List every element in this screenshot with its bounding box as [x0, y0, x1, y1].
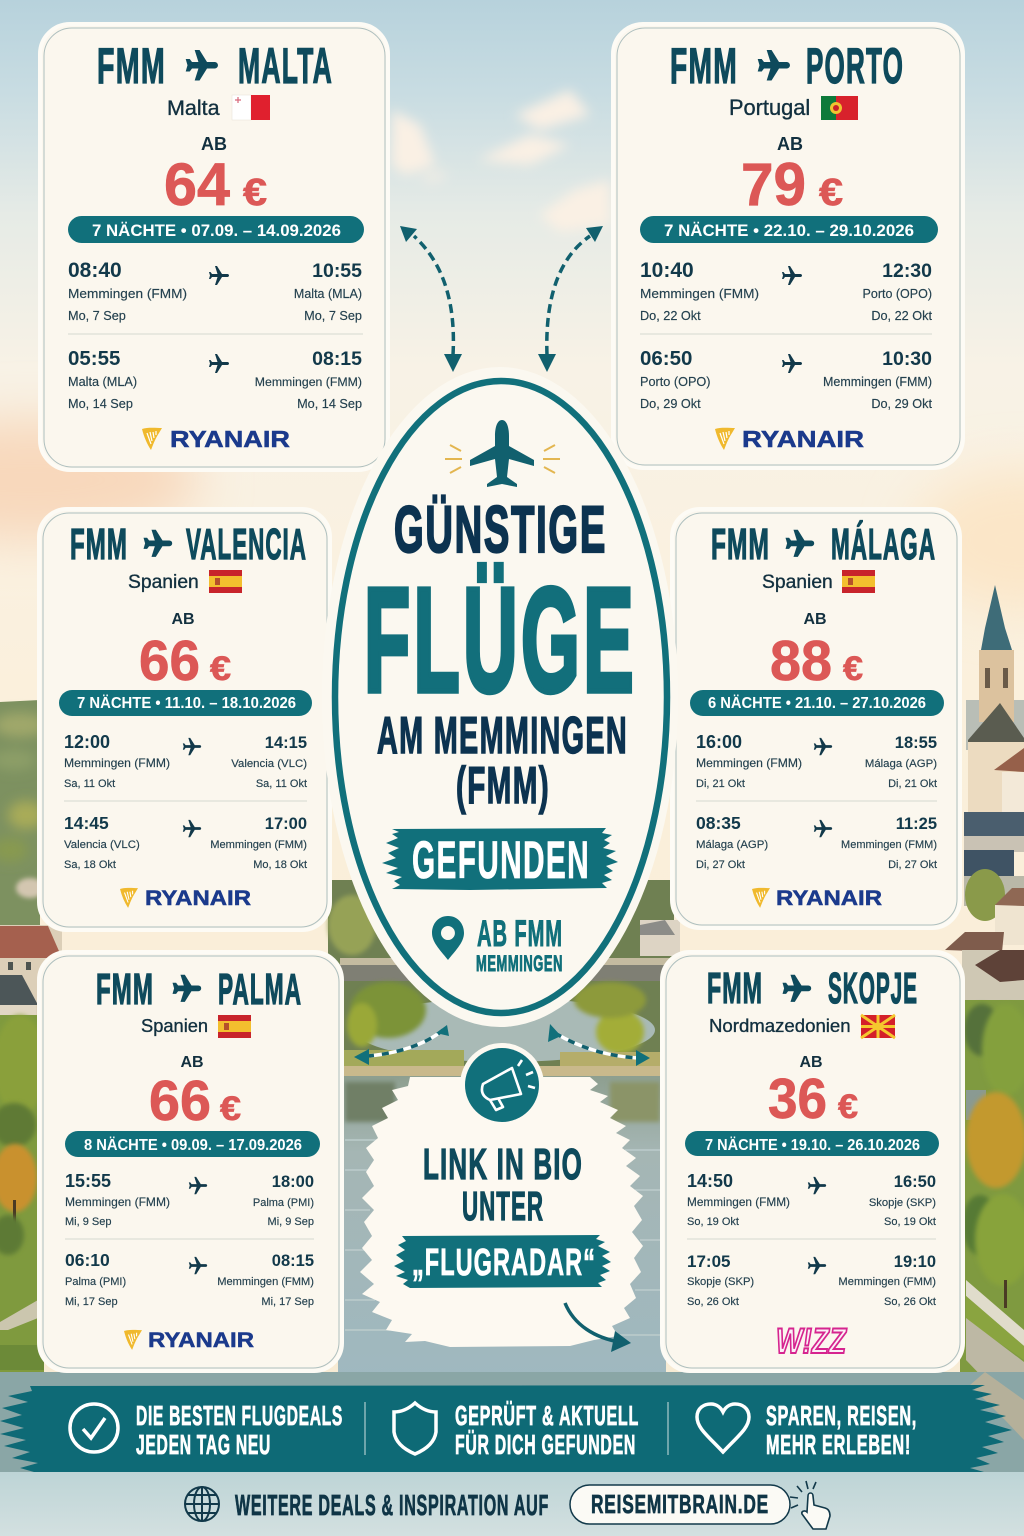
- text: beste Flugdeals: DIE BESTEN FLUGDEALS: [136, 1400, 343, 1431]
- outbound flight: So, 19 Okt: [884, 1216, 936, 1228]
- return flight: Memmingen (FMM): [841, 839, 937, 851]
- town right: [966, 700, 1024, 750]
- logo: Ryanair: RYANAIR: [776, 887, 882, 910]
- return flight: Di, 27 Okt: [696, 859, 745, 871]
- button: reisemitbrain.de: REISEMITBRAIN.DE: [591, 1489, 769, 1519]
- icon: shield: [394, 1403, 436, 1454]
- price: ab 66 euro: 66: [139, 629, 200, 693]
- return flight: So, 26 Okt: [884, 1296, 936, 1308]
- return flight: Mi, 17 Sep: [65, 1296, 118, 1308]
- icon: heart: [697, 1404, 749, 1452]
- banner: benefits: [0, 1385, 1012, 1472]
- banner: Gefunden: [382, 828, 618, 890]
- icon: pointer hand: [790, 1481, 830, 1529]
- hazy hillside left: [0, 700, 40, 930]
- text: geprüft und aktuell: GEPRÜFT & AKTUELL: [455, 1400, 639, 1431]
- outbound flight: Skopje (SKP): [869, 1197, 936, 1209]
- right trees and promenade: [960, 1000, 1024, 1380]
- outbound flight: Mi, 9 Sep: [268, 1216, 314, 1228]
- heading: FMM to Malaga: [711, 519, 936, 569]
- country: Malta with flag: Malta: [167, 96, 220, 120]
- outbound flight: Memmingen (FMM): [687, 1196, 790, 1209]
- price: ab 36 euro: €: [838, 1088, 858, 1126]
- text: geprüft und aktuell: [455, 1400, 639, 1460]
- logo: Ryanair: [715, 426, 864, 452]
- price: ab 79 euro: €: [819, 172, 843, 214]
- heading: FMM to Valencia: [70, 520, 307, 569]
- return flight: [64, 813, 307, 871]
- date pill: 7 NÄCHTE • 19.10. – 26.10.2026: [705, 1137, 920, 1154]
- price: ab 88 euro: €: [843, 650, 863, 688]
- return flight: Memmingen (FMM): [217, 1276, 314, 1288]
- return flight: Di, 27 Okt: [888, 859, 937, 871]
- country: Portugal with flag: [729, 95, 858, 120]
- heading: am Memmingen (FMM): AM MEMMINGEN: [377, 707, 628, 765]
- return flight: Mo, 14 Sep: [297, 397, 362, 411]
- panel: link in bio: [360, 1043, 643, 1352]
- date pill: 6 NÄCHTE • 21.10. – 27.10.2026: [708, 695, 926, 712]
- outbound flight: Valencia (VLC): [231, 758, 307, 770]
- outbound flight: [696, 732, 937, 790]
- price: ab 64 euro: €: [243, 172, 267, 214]
- return flight: Porto (OPO): [640, 375, 710, 389]
- text: link in bio unter: UNTER: [462, 1183, 544, 1229]
- text: weitere deals: WEITERE DEALS & INSPIRATION AUF: [235, 1490, 549, 1522]
- heading: Flüge: FLÜGE: [364, 558, 637, 723]
- heading: FMM to Porto: FMM: [670, 38, 738, 94]
- panel: Porto: [613, 24, 963, 468]
- left trees and meadow: [0, 1015, 44, 1375]
- footer: website link: [185, 1481, 830, 1529]
- outbound flight: Sa, 11 Okt: [256, 778, 307, 790]
- outbound flight: Málaga (AGP): [865, 758, 937, 770]
- date pill: 7 NÄCHTE • 07.09. – 14.09.2026: [92, 221, 341, 240]
- country: Spanien with flag: [141, 1015, 251, 1038]
- heading: am Memmingen (FMM): (FMM): [456, 757, 550, 815]
- return flight: [640, 347, 932, 411]
- outbound flight: 10:55: [312, 260, 362, 282]
- country: Nordmazedonien with flag: Nordmazedonien: [709, 1015, 851, 1036]
- heading: FMM to Palma: FMM: [96, 965, 154, 1014]
- price: ab 66 euro: AB: [171, 611, 195, 628]
- banner: Flugradar: „FLUGRADAR“: [412, 1242, 596, 1284]
- outbound flight: 10:40: [640, 259, 694, 282]
- return flight: Málaga (AGP): [696, 839, 768, 851]
- logo: Ryanair: RYANAIR: [148, 1329, 254, 1352]
- outbound flight: 14:50: [687, 1171, 733, 1191]
- date pill: [65, 1131, 320, 1157]
- return flight: 06:10: [65, 1250, 110, 1270]
- text: beste Flugdeals: JEDEN TAG NEU: [136, 1429, 271, 1460]
- heading: FMM to Valencia: FMM: [70, 520, 128, 569]
- heading: am Memmingen (FMM): [377, 707, 628, 815]
- date pill: 7 NÄCHTE • 11.10. – 18.10.2026: [77, 695, 296, 712]
- arrow: dashed to Porto: [538, 226, 603, 372]
- heading: FMM to Skopje: [707, 964, 918, 1013]
- outbound flight: Do, 22 Okt: [871, 309, 932, 323]
- heading: FMM to Porto: [670, 38, 904, 94]
- price: ab 36 euro: 36: [768, 1067, 827, 1131]
- return flight: Mo, 18 Okt: [253, 859, 307, 871]
- outbound flight: 14:15: [265, 734, 307, 752]
- logo: Ryanair: RYANAIR: [742, 426, 864, 452]
- price: ab 79 euro: 79: [741, 151, 806, 218]
- outbound flight: Memmingen (FMM): [64, 757, 170, 770]
- return flight: Do, 29 Okt: [871, 397, 932, 411]
- outbound flight: [687, 1171, 936, 1228]
- price: ab 36 euro: AB: [799, 1054, 823, 1071]
- price: ab 88 euro: [770, 611, 863, 693]
- panel: Valencia: [39, 509, 330, 930]
- outbound flight: [68, 259, 362, 323]
- arrow: to Skopje: [565, 1303, 631, 1352]
- return flight: Mo, 14 Sep: [68, 397, 133, 411]
- return flight: 08:15: [312, 348, 362, 370]
- date pill: [690, 690, 944, 716]
- date pill: 8 NÄCHTE • 09.09. – 17.09.2026: [84, 1137, 302, 1154]
- heading: FMM to Skopje: FMM: [707, 964, 763, 1013]
- country: Spanien with flag: Spanien: [762, 572, 833, 593]
- heading: FMM to Porto: PORTO: [806, 38, 904, 94]
- text: ab FMM Memmingen: AB FMM: [477, 913, 563, 954]
- outbound flight: Palma (PMI): [253, 1197, 314, 1209]
- outbound flight: 08:40: [68, 259, 122, 282]
- arrow: dashed to Palma: [354, 1025, 449, 1065]
- panel: Malaga: [672, 509, 960, 928]
- heading: FMM to Malta: FMM: [97, 38, 166, 94]
- return flight: Palma (PMI): [65, 1276, 126, 1288]
- icon: globe: [185, 1487, 219, 1521]
- button: reisemitbrain.de: [570, 1485, 790, 1524]
- outbound flight: 12:00: [64, 732, 110, 752]
- country: Spanien with flag: Spanien: [128, 572, 199, 593]
- price: ab 66 euro: AB: [180, 1054, 204, 1071]
- panel: Palma: [39, 952, 342, 1371]
- return flight: 17:05: [687, 1252, 730, 1271]
- outbound flight: Do, 22 Okt: [640, 309, 701, 323]
- price: ab 79 euro: AB: [777, 134, 803, 154]
- panel: Skopje: [662, 952, 963, 1371]
- outbound flight: 18:00: [272, 1173, 314, 1191]
- panel: central oval title: [322, 367, 678, 1027]
- return flight: 08:15: [272, 1252, 314, 1270]
- return flight: 14:45: [64, 813, 109, 833]
- river: [338, 1076, 666, 1382]
- date pill: [640, 216, 938, 243]
- heading: FMM to Palma: [96, 965, 302, 1014]
- outbound flight: Di, 21 Okt: [888, 778, 937, 790]
- return flight: 11:25: [896, 815, 937, 833]
- country: Malta with flag: [167, 95, 270, 120]
- price: ab 66 euro: 66: [149, 1069, 211, 1133]
- heading: FMM to Palma: PALMA: [218, 965, 302, 1014]
- country: Spanien with flag: [128, 570, 242, 593]
- outbound flight: Memmingen (FMM): [65, 1196, 170, 1209]
- price: ab 64 euro: 64: [164, 151, 231, 218]
- icon: plane with rays: [445, 420, 560, 487]
- logo: Ryanair: RYANAIR: [145, 887, 251, 910]
- outbound flight: 15:55: [65, 1171, 111, 1191]
- arrow: dashed to Skopje: [548, 1024, 650, 1066]
- date pill: 7 NÄCHTE • 22.10. – 29.10.2026: [664, 221, 914, 240]
- price: ab 66 euro: €: [220, 1090, 241, 1128]
- heading: FMM to Malta: [97, 38, 333, 94]
- return flight: Sa, 18 Okt: [64, 859, 116, 871]
- text: sparen reisen: [766, 1400, 917, 1460]
- text: ab FMM Memmingen: [476, 913, 563, 976]
- price: ab 36 euro: [768, 1054, 858, 1131]
- date pill: [68, 216, 364, 243]
- outbound flight: 16:00: [696, 732, 742, 752]
- text: link in bio unter: LINK IN BIO: [423, 1140, 583, 1189]
- heading: FMM to Valencia: VALENCIA: [186, 520, 307, 569]
- panel: Skopje: SKOPJE: [828, 964, 918, 1013]
- heading: Günstige: GÜNSTIGE: [394, 492, 607, 566]
- return flight: [65, 1250, 314, 1308]
- text: sparen reisen: SPAREN, REISEN,: [766, 1400, 917, 1431]
- outbound flight: Mo, 7 Sep: [304, 309, 362, 323]
- country: Spanien with flag: Spanien: [141, 1015, 208, 1036]
- return flight: 19:10: [894, 1253, 936, 1271]
- outbound flight: So, 19 Okt: [687, 1216, 739, 1228]
- return flight: [687, 1252, 936, 1308]
- return flight: Malta (MLA): [68, 375, 137, 389]
- return flight: So, 26 Okt: [687, 1296, 739, 1308]
- town left: [0, 925, 62, 1035]
- arrow: dashed to Malta: [400, 226, 462, 372]
- return flight: 08:35: [696, 813, 741, 833]
- text: geprüft und aktuell: FÜR DICH GEFUNDEN: [455, 1429, 636, 1460]
- icon: megaphone: [460, 1043, 544, 1127]
- text: beste Flugdeals: [136, 1400, 343, 1460]
- outbound flight: 18:55: [895, 734, 937, 752]
- return flight: [696, 813, 937, 871]
- outbound flight: Malta (MLA): [294, 287, 362, 301]
- price: ab 64 euro: AB: [201, 134, 227, 154]
- date pill: [685, 1131, 939, 1156]
- text: link in bio unter: [423, 1140, 583, 1229]
- return flight: 10:30: [882, 348, 932, 370]
- outbound flight: [64, 732, 307, 790]
- outbound flight: Memmingen (FMM): [696, 757, 802, 770]
- price: ab 79 euro: [741, 134, 843, 218]
- return flight: Memmingen (FMM): [210, 839, 307, 851]
- price: ab 64 euro: [164, 134, 267, 218]
- outbound flight: Mo, 7 Sep: [68, 309, 126, 323]
- return flight: Skopje (SKP): [687, 1276, 754, 1288]
- logo: Ryanair: [142, 426, 290, 452]
- return flight: Do, 29 Okt: [640, 397, 701, 411]
- outbound flight: Porto (OPO): [863, 287, 932, 301]
- outbound flight: [65, 1171, 314, 1228]
- return flight: Valencia (VLC): [64, 839, 140, 851]
- outbound flight: 12:30: [882, 260, 932, 282]
- return flight: 17:00: [265, 815, 307, 833]
- outbound flight: Di, 21 Okt: [696, 778, 745, 790]
- heading: FMM to Malaga: FMM: [711, 520, 770, 569]
- text: sparen reisen: MEHR ERLEBEN!: [766, 1429, 911, 1460]
- outbound flight: Mi, 9 Sep: [65, 1216, 111, 1228]
- outbound flight: Sa, 11 Okt: [64, 778, 115, 790]
- icon: check circle: [70, 1404, 118, 1452]
- logo: Ryanair: RYANAIR: [170, 426, 290, 452]
- return flight: Memmingen (FMM): [838, 1276, 936, 1288]
- price: ab 66 euro: €: [210, 650, 231, 688]
- outbound flight: Memmingen (FMM): [68, 286, 187, 301]
- heading: FMM to Malta: MALTA: [238, 38, 333, 94]
- return flight: 06:50: [640, 347, 692, 370]
- price: ab 66 euro: [139, 611, 231, 693]
- return flight: Mi, 17 Sep: [261, 1296, 314, 1308]
- return flight: Memmingen (FMM): [255, 375, 362, 389]
- price: ab 88 euro: 88: [770, 629, 832, 693]
- center landscape behind oval: [328, 880, 674, 1080]
- logo: Wizz: W!ZZ: [776, 1322, 847, 1361]
- icon: location pin: [432, 916, 464, 960]
- outbound flight: Memmingen (FMM): [640, 286, 759, 301]
- banner: Gefunden: GEFUNDEN: [412, 831, 590, 890]
- outbound flight: [640, 259, 932, 323]
- price: ab 66 euro: [149, 1054, 241, 1133]
- return flight: [68, 347, 362, 411]
- country: Nordmazedonien with flag: [709, 1015, 895, 1038]
- date pill: [59, 690, 312, 716]
- country: Spanien with flag: [762, 570, 875, 593]
- return flight: 05:55: [68, 347, 120, 370]
- banner: Flugradar: [394, 1235, 611, 1288]
- lower water and sky: [0, 1372, 1024, 1475]
- text: ab FMM Memmingen: MEMMINGEN: [476, 951, 563, 976]
- price: ab 88 euro: AB: [803, 611, 827, 628]
- outbound flight: 16:50: [894, 1173, 936, 1191]
- country: Portugal with flag: Portugal: [729, 95, 810, 120]
- return flight: Memmingen (FMM): [823, 375, 932, 389]
- panel: Malta: [40, 24, 388, 470]
